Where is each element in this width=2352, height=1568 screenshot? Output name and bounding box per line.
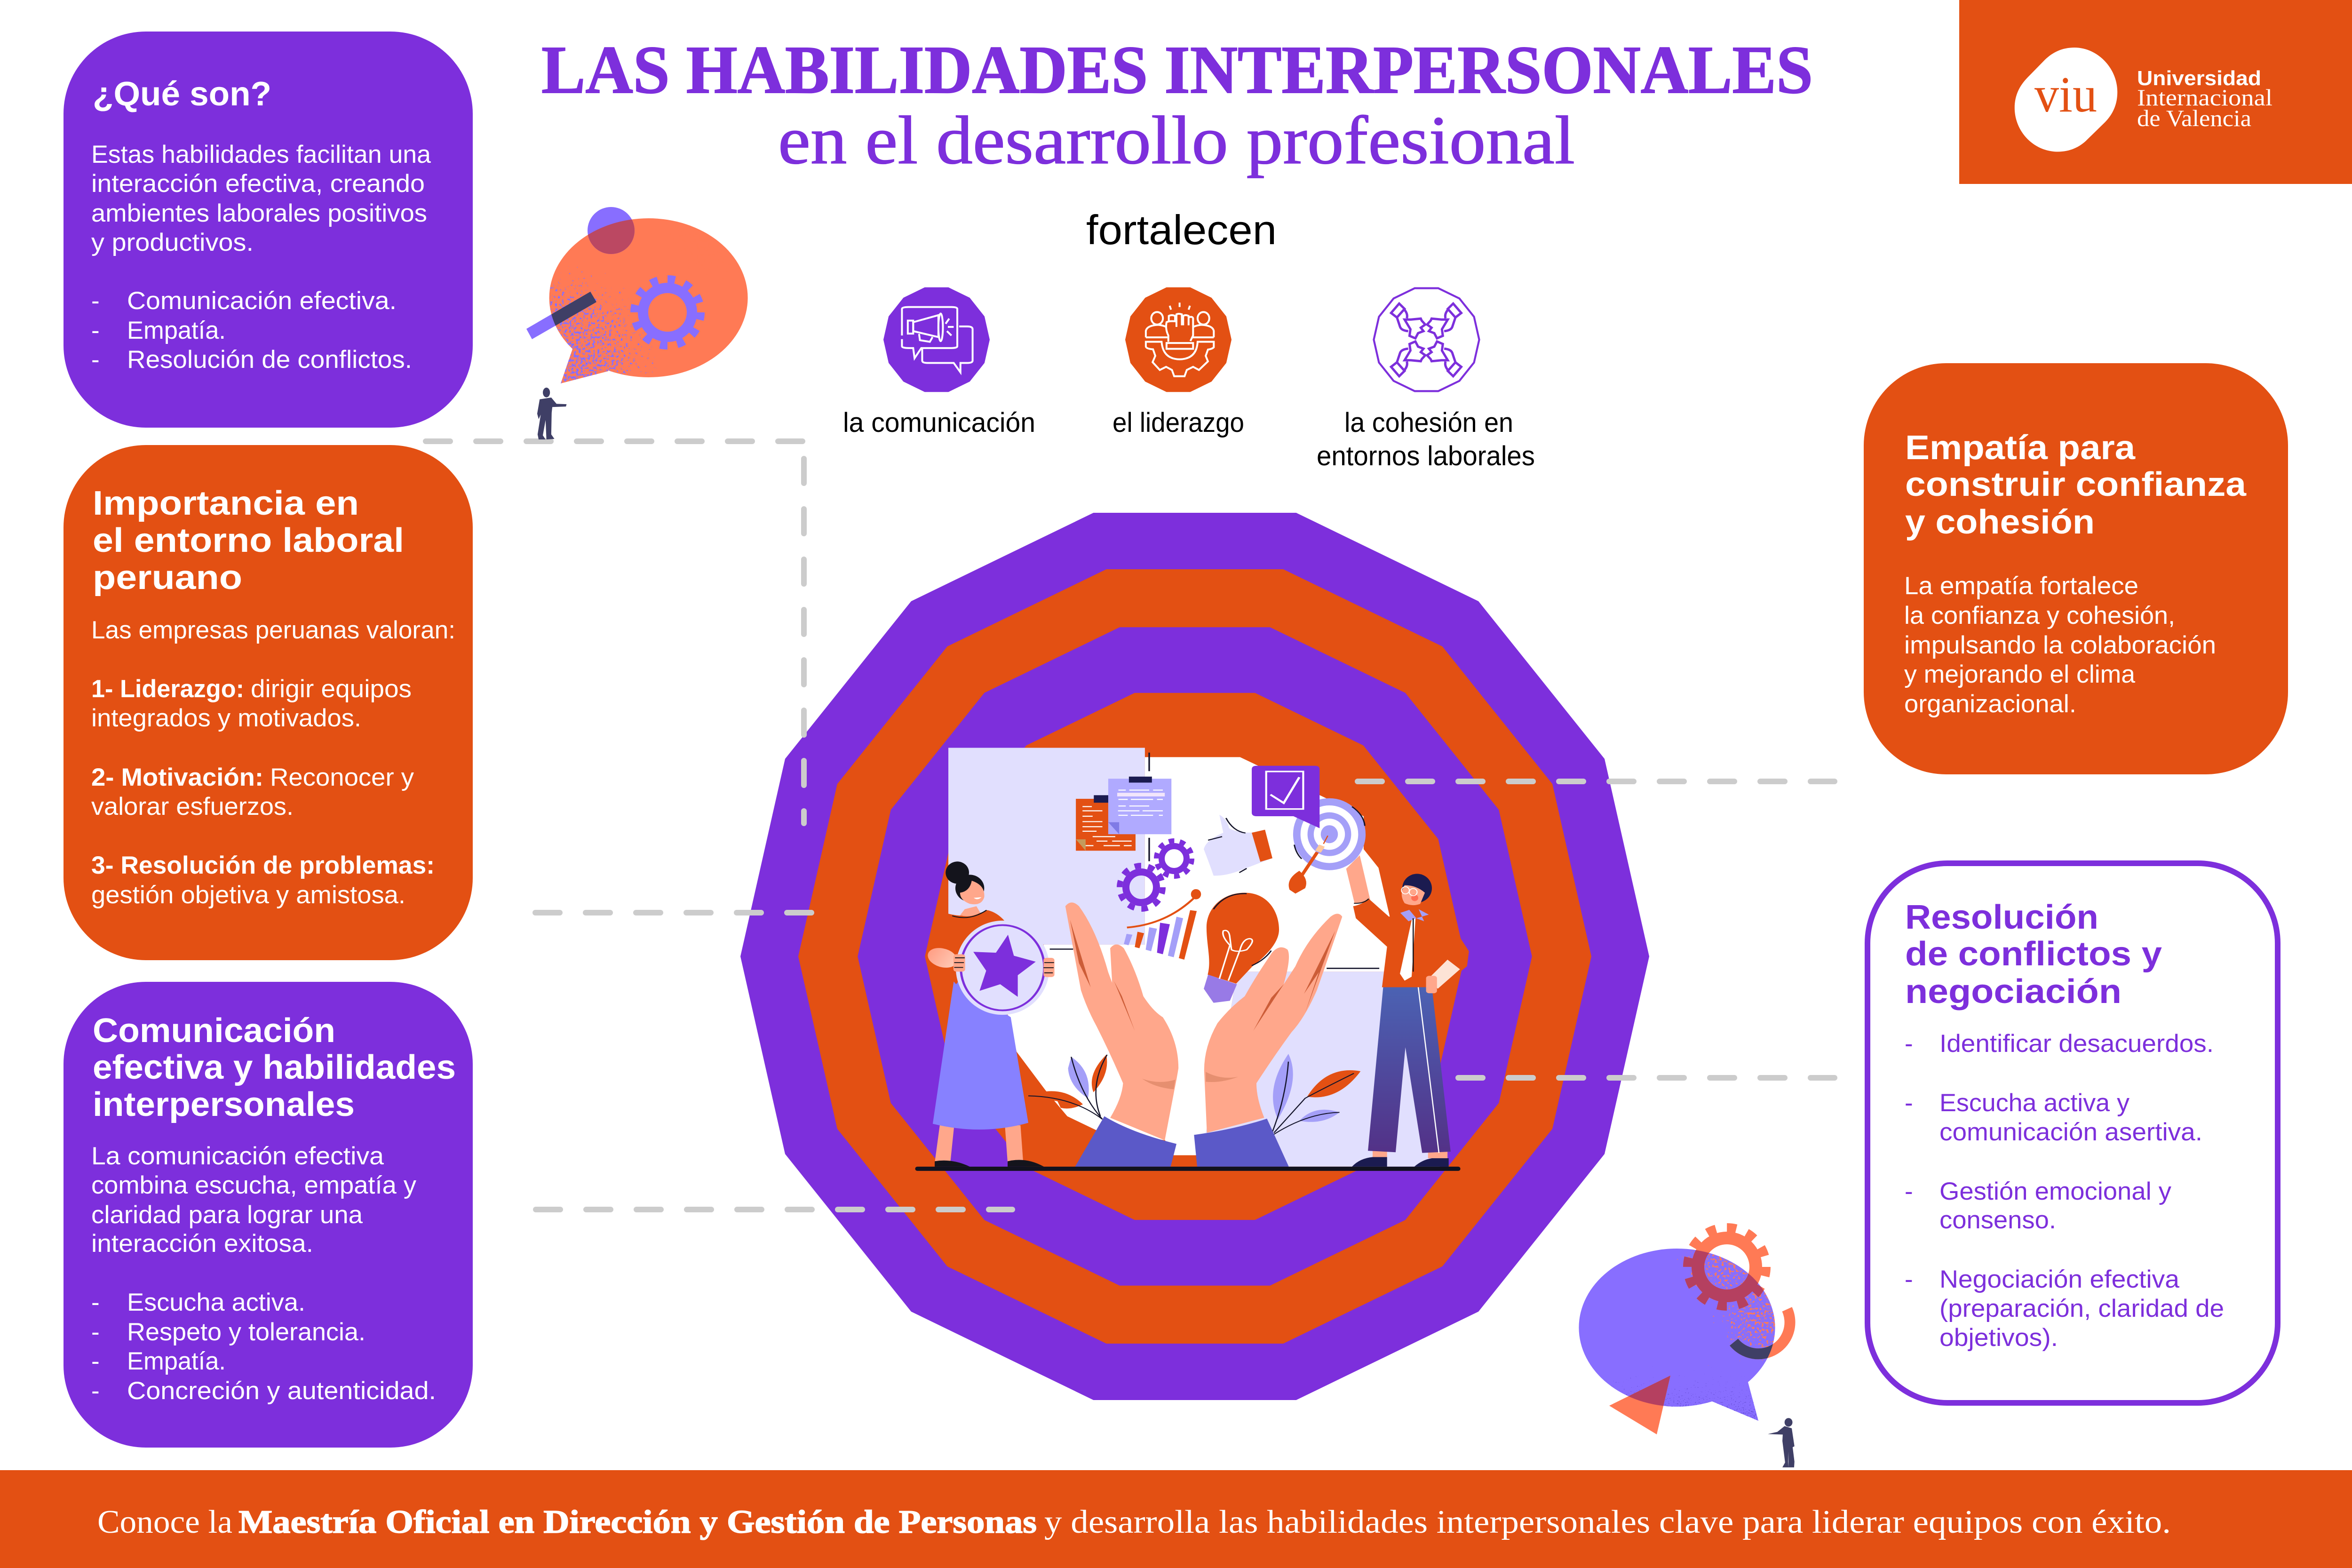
heading: Resolución: negociación (1905, 973, 2122, 1011)
text: comunicación efectiva: interacción exitosa. (91, 1230, 313, 1258)
list: pasos de resolución: - (1905, 1178, 1913, 1205)
text: comunicación efectiva (91, 1142, 417, 1258)
heading: Empatía: y cohesión (1905, 503, 2095, 541)
list: pasos de resolución: (preparación, claridad de (1939, 1295, 2224, 1322)
illustration backdrop panels (948, 748, 1440, 1167)
text: empatía: organizacional. (1904, 690, 2076, 718)
title: en el desarrollo profesional (778, 102, 1575, 178)
text: empresas peruanas: gestión objetiva y amistosa. (91, 881, 405, 909)
list: pasos de resolución: - (1905, 1266, 1913, 1293)
text: definición: y productivos. (91, 229, 254, 256)
icon: light bulb (1204, 893, 1279, 1003)
icon: liderazgo (1125, 287, 1232, 392)
title (541, 32, 1813, 178)
icon: comunicación (883, 287, 990, 392)
connector: dashed line from Qué son panel to centre (426, 441, 805, 823)
text: empresas peruanas: dirigir equipos (251, 675, 412, 703)
list: habilidades: - (91, 346, 100, 374)
logo: Universidad Internacional de Valencia: Internacional (2137, 84, 2273, 111)
footer banner (0, 1470, 2352, 1568)
text: empresas peruanas: 3- Resolución de problemas: (91, 852, 435, 879)
text: empatía: la confianza y cohesión, (1904, 602, 2175, 629)
text: empatía: y mejorando el clima (1904, 661, 2136, 688)
banner text (97, 1504, 2171, 1540)
plants (1028, 1054, 1360, 1134)
label: la cohesión en entornos laborales (1317, 407, 1535, 471)
panel: Resolución de conflictos y negociación (1867, 863, 2278, 1403)
heading: Comunicación: efectiva y habilidades (93, 1049, 456, 1086)
heading: Empatía: construir confianza (1905, 466, 2247, 503)
heading: Importancia: Importancia en (93, 485, 359, 522)
label: el liderazgo: el liderazgo (1112, 407, 1244, 438)
list: habilidades: Empatía. (127, 317, 226, 344)
list: habilidades: Resolución de conflictos. (127, 346, 412, 374)
list: claves de comunicación: Respeto y tolerancia. (127, 1318, 366, 1346)
heading: Resolución: Resolución (1905, 899, 2098, 936)
heading: Importancia: peruano (93, 559, 242, 597)
person silhouette, bottom right (1768, 1418, 1795, 1467)
person silhouette, top left (537, 388, 566, 439)
label: la comunicación: la comunicación (843, 407, 1035, 438)
logo: Universidad Internacional de Valencia: Universidad (2137, 67, 2261, 90)
heading: Resolución (1905, 899, 2162, 1011)
list: claves de comunicación (91, 1289, 436, 1405)
banner text: Conoce la (97, 1504, 232, 1540)
icon: cohesión (1374, 288, 1479, 391)
list: claves de comunicación: Escucha activa. (127, 1289, 305, 1316)
heading: Empatía: Empatía para (1905, 429, 2136, 467)
text: empatía: impulsando la colaboración (1904, 631, 2216, 659)
heading: Importancia: el entorno laboral (93, 522, 404, 559)
list: claves de comunicación: - (91, 1377, 100, 1405)
label: la cohesión en entornos laborales: entornos laborales (1317, 441, 1535, 471)
decorative speech bubble with gear, top left (526, 207, 748, 383)
list: pasos de resolución: Escucha activa y (1939, 1089, 2130, 1117)
list: claves de comunicación: - (91, 1347, 100, 1375)
heading: Empatía (1905, 429, 2247, 541)
central concentric polygon rings (740, 513, 1649, 1400)
banner text: y desarrolla las habilidades interpersonales clave para liderar equipos con éxito. (1044, 1504, 2171, 1540)
heading: Resolución: de conflictos y (1905, 935, 2162, 973)
list: pasos de resolución: - (1905, 1030, 1913, 1058)
decorative speech bubble with gear, bottom right (1579, 1223, 1796, 1434)
list: habilidades: - (91, 317, 100, 344)
heading: Importancia (93, 485, 404, 597)
list: claves de comunicación: - (91, 1289, 100, 1316)
text: definición: Estas habilidades facilitan una (91, 141, 431, 168)
text: empresas peruanas: 2- Motivación: (91, 764, 263, 791)
floor line (915, 1167, 1461, 1171)
list: pasos de resolución: Gestión emocional y (1939, 1178, 2172, 1205)
list: habilidades: Comunicación efectiva. (127, 287, 397, 315)
icon: growth bars and arrow (1124, 889, 1201, 960)
connector: dashed line from Importancia panel (535, 910, 812, 915)
title: LAS HABILIDADES INTERPERSONALES (541, 32, 1813, 108)
text: empresas peruanas: integrados y motivados. (91, 704, 361, 732)
heading: ¿Qué son?: ¿Qué son? (93, 75, 271, 113)
logo: Universidad Internacional de Valencia (1959, 0, 2352, 184)
text: empresas peruanas: valorar esfuerzos. (91, 793, 294, 820)
connector: dashed line to Empatía panel (1358, 779, 1835, 784)
logo: Universidad Internacional de Valencia: de Valencia (2137, 105, 2251, 131)
man with target (1346, 855, 1469, 1167)
list: pasos de resolución: Negociación efectiva (1939, 1266, 2180, 1293)
text: definición (91, 141, 431, 256)
list: pasos de resolución: comunicación asertiva. (1939, 1118, 2202, 1146)
icon: thumbs up (1204, 815, 1272, 876)
connector: dashed line to Resolución panel (1458, 1075, 1835, 1081)
woman holding star badge (923, 861, 1055, 1167)
text: empresas peruanas: Las empresas peruanas valoran: (91, 616, 455, 644)
list: claves de comunicación: Concreción y autenticidad. (127, 1377, 436, 1405)
text: empresas peruanas: Reconocer y (270, 764, 414, 791)
sticky notes (1076, 777, 1171, 851)
label: la cohesión en entornos laborales: la cohesión en (1344, 407, 1513, 438)
heading: Comunicación: Comunicación (93, 1012, 335, 1050)
text: definición: ambientes laborales positivos (91, 199, 427, 227)
text: comunicación efectiva: La comunicación efectiva (91, 1142, 384, 1170)
icon: target with dart (1289, 798, 1366, 894)
text: fortalecen: fortalecen (1086, 207, 1277, 253)
list: pasos de resolución (1905, 1030, 2224, 1352)
list: pasos de resolución: - (1905, 1089, 1913, 1117)
open hands (1065, 902, 1342, 1167)
list: pasos de resolución: Identificar desacuerdos. (1939, 1030, 2214, 1058)
banner text: Maestría Oficial en Dirección y Gestión de Personas (238, 1504, 1037, 1540)
text: empresas peruanas: 1- Liderazgo: (91, 675, 244, 703)
text: comunicación efectiva: claridad para lograr una (91, 1201, 363, 1229)
central illustration: people, hands and ideas (915, 748, 1469, 1171)
list: pasos de resolución: consenso. (1939, 1206, 2056, 1234)
text: empresas peruanas (91, 616, 455, 909)
heading: Comunicación (93, 1012, 456, 1123)
list: habilidades: - (91, 287, 100, 315)
text: empatía: La empatía fortalece (1904, 572, 2138, 600)
connector: dashed line from Comunicación panel (536, 1207, 1012, 1212)
heading: Comunicación: interpersonales (93, 1086, 355, 1123)
text: comunicación efectiva: combina escucha, empatía y (91, 1171, 417, 1199)
list: claves de comunicación: Empatía. (127, 1347, 226, 1375)
panel: Comunicación efectiva y habilidades interpersonales (64, 982, 473, 1448)
icon: checkbox speech bubble (1252, 766, 1319, 828)
text: empatía (1904, 572, 2216, 718)
illustration gears (1120, 841, 1192, 909)
panel: Empatía para construir confianza y cohesión (1864, 363, 2288, 774)
text: definición: interacción efectiva, creando (91, 170, 425, 198)
panel: ¿Qué son? (64, 32, 473, 428)
panel: Importancia en el entorno laboral peruano (64, 445, 473, 960)
list: habilidades (91, 287, 412, 374)
list: claves de comunicación: - (91, 1318, 100, 1346)
list: pasos de resolución: objetivos). (1939, 1324, 2058, 1352)
logo: Universidad Internacional de Valencia: viu (2034, 67, 2097, 123)
